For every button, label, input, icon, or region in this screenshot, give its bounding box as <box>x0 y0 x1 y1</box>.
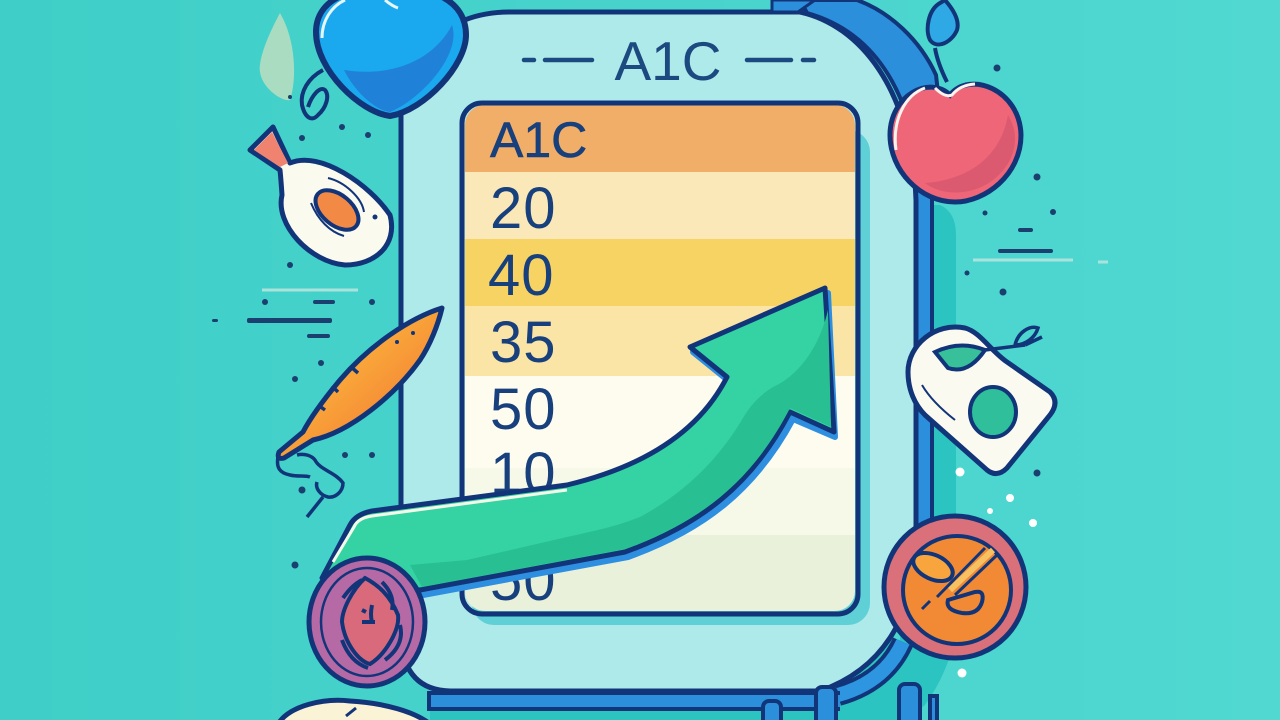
table values: 20 <box>490 176 557 241</box>
icon: purple medallion <box>309 558 425 686</box>
icon: leaf bag <box>908 327 1055 474</box>
icon: connector posts <box>763 684 937 720</box>
panel: main card <box>401 12 916 691</box>
table values: 35 <box>490 310 557 375</box>
table values: A1C <box>490 112 587 168</box>
icon: carrot <box>278 308 442 517</box>
table shadow <box>472 130 870 625</box>
icon: fish <box>250 127 392 265</box>
table values <box>488 112 587 613</box>
icon: cherry <box>890 0 1021 202</box>
icon: blue apple <box>302 0 466 118</box>
icon: pale leaf <box>260 13 294 100</box>
table values: 40 <box>488 243 555 308</box>
tube top clip <box>772 0 815 12</box>
table <box>460 100 860 615</box>
icon: bread loaf <box>278 700 430 720</box>
rising arrow <box>322 288 835 595</box>
decorative specks <box>212 64 1056 568</box>
card heading: A1C <box>614 30 722 92</box>
blue tube frame <box>427 0 940 701</box>
panel shadow band <box>430 205 956 720</box>
table values: 50 <box>490 548 557 613</box>
icon: orange no-sign badge <box>884 516 1026 658</box>
table values: 50 <box>490 377 557 442</box>
table values: 10 <box>490 441 557 506</box>
